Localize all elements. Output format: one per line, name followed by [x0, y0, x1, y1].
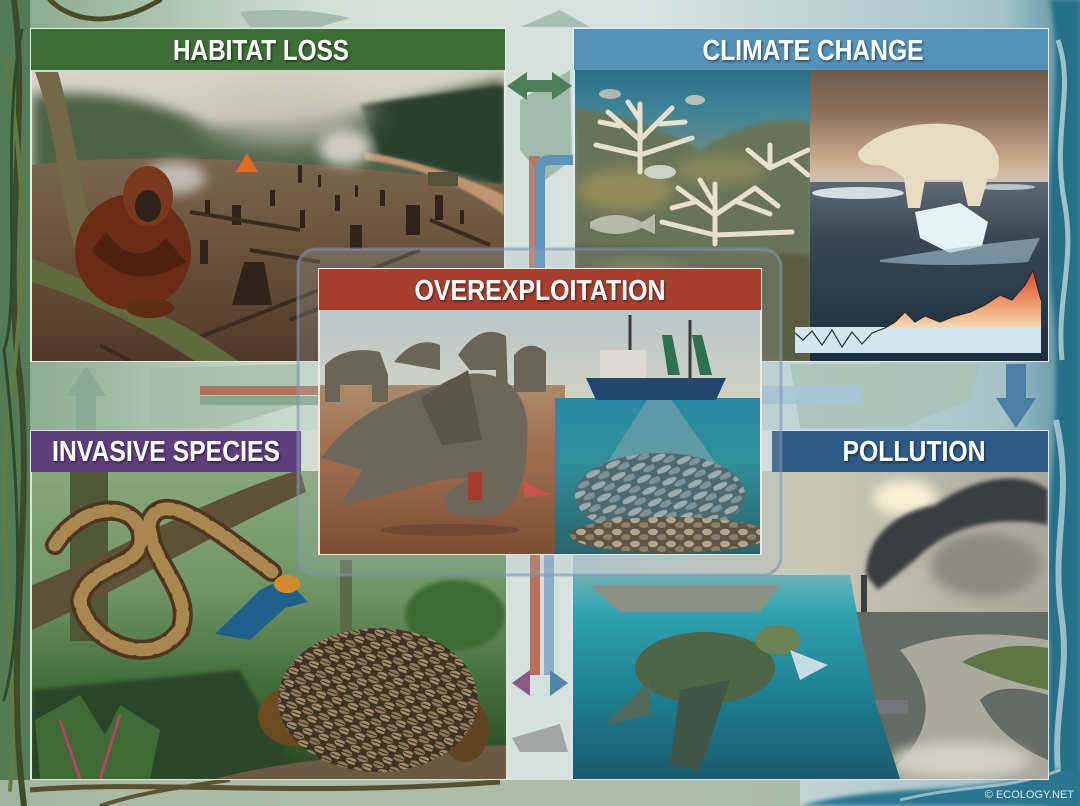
- icon: melting ice floe: [915, 203, 988, 253]
- heading: pollution: POLLUTION: [842, 436, 986, 468]
- heading: climate change: CLIMATE CHANGE: [702, 35, 924, 67]
- polluted coast scene: [573, 471, 1048, 779]
- panel: climate change: [573, 28, 1049, 362]
- icon: elephant herd: [325, 332, 546, 402]
- panel: pollution: [571, 430, 1049, 780]
- heading: overexploitation: OVEREXPLOITATION: [414, 275, 666, 307]
- heading: overexploitation: [319, 269, 761, 310]
- icon: fishing trawler: [586, 315, 726, 400]
- heading: habitat loss: HABITAT LOSS: [173, 35, 349, 67]
- jungle scene: [32, 470, 506, 779]
- heading: pollution: [772, 431, 1048, 472]
- arrow: climate change down to pollution: [996, 364, 1036, 428]
- icon: orangutan: [75, 166, 191, 318]
- habitat loss scene: [32, 70, 504, 361]
- halo frame: rounded outline around overexploitation: [298, 249, 781, 575]
- links: horizontal connectors: [200, 386, 862, 405]
- panel: overexploitation: [318, 268, 770, 555]
- heading: habitat loss: [31, 29, 505, 70]
- heading: invasive species: INVASIVE SPECIES: [52, 436, 280, 468]
- arrows: overexploitation down to invasive species and pollution: [512, 555, 568, 752]
- credit: © ECOLOGY.NET: [985, 789, 1074, 801]
- icon: python snake: [55, 509, 272, 650]
- elephant and overfishing scene: [320, 310, 770, 554]
- icon: sea turtle with net: [605, 625, 828, 770]
- icon: fallen elephant: [322, 370, 550, 518]
- panel: habitat loss: [30, 28, 506, 362]
- icon: bird: [215, 578, 308, 640]
- icon: polar bear: [858, 124, 999, 208]
- polar bear scene: [810, 70, 1048, 361]
- panel: invasive species: [30, 430, 508, 780]
- arrow: overexploitation links up to climate change: [529, 156, 573, 268]
- arrow: habitat loss to climate change: [507, 72, 572, 100]
- arrow: invasive species up to habitat loss: [66, 366, 106, 430]
- heading: invasive species: [31, 431, 301, 472]
- chart: temperature rise: [795, 270, 1041, 353]
- heading: climate change: [574, 29, 1048, 70]
- icon: zebra mussels on clams: [215, 628, 506, 779]
- coral reef scene: [575, 70, 810, 361]
